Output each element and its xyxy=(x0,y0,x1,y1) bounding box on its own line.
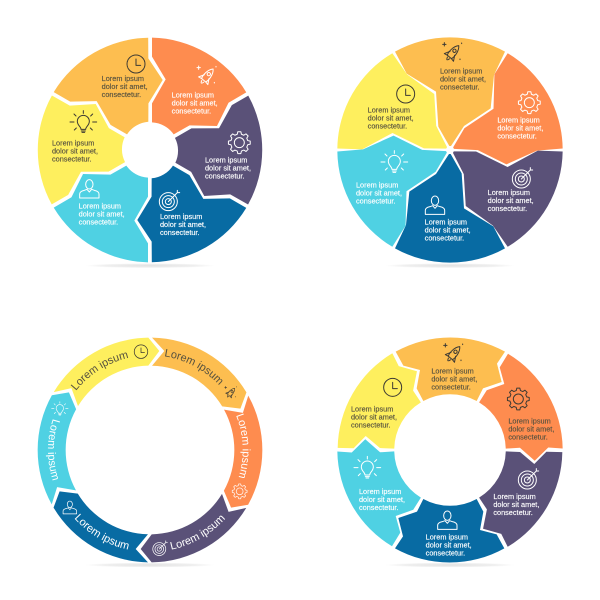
segment: yellow: dolor sit amet, xyxy=(52,147,98,156)
segment: purple: dolor sit amet, xyxy=(493,500,539,509)
segment: yellow: consectetur. xyxy=(52,155,92,164)
segment: blue xyxy=(115,160,246,290)
chart 1: pie with small centre hole xyxy=(5,10,295,290)
segment: orange arrow: Lorem ipsum xyxy=(236,414,251,478)
segment: yellow: Lorem ipsum xyxy=(368,105,410,114)
segment: orange arrow xyxy=(224,396,262,508)
segment: yellow: consectetur. xyxy=(351,421,391,430)
segment: blue: Lorem ipsum xyxy=(160,212,202,221)
segment: cyan: Lorem ipsum xyxy=(356,180,398,189)
segment: blue: consectetur. xyxy=(426,548,465,557)
segment: orange: Lorem ipsum xyxy=(508,417,551,426)
segment: yellow xyxy=(325,346,435,473)
chart 3: thin arrow ring xyxy=(38,338,262,567)
segment: orange: Lorem ipsum xyxy=(497,115,540,124)
segment: cyan: consectetur. xyxy=(79,217,118,226)
segment: gold arrow xyxy=(152,338,246,409)
segment: orange: consectetur. xyxy=(172,106,211,115)
segment: yellow xyxy=(5,74,135,204)
segment: orange: Lorem ipsum xyxy=(172,90,214,99)
segment: cyan: Lorem ipsum xyxy=(79,201,121,210)
segment: yellow: Lorem ipsum xyxy=(52,139,94,148)
segment: orange xyxy=(152,38,246,134)
segment: purple: Lorem ipsum xyxy=(488,188,530,197)
segment: purple: consectetur. xyxy=(488,204,527,213)
segment: purple xyxy=(465,427,575,554)
segment: gold: dolor sit amet, xyxy=(102,82,148,91)
segment: blue arrow: Lorem ipsum xyxy=(74,514,129,550)
segment: purple: dolor sit amet, xyxy=(205,163,251,172)
segment: purple arrow xyxy=(140,494,246,562)
shadow xyxy=(385,563,515,567)
segment: blue: dolor sit amet, xyxy=(160,220,206,229)
segment: cyan: dolor sit amet, xyxy=(356,188,402,197)
segment: cyan arrow xyxy=(38,392,76,504)
segment: gold xyxy=(396,337,505,401)
segment: gold: Lorem ipsum xyxy=(440,66,482,75)
segment: blue: consectetur. xyxy=(160,228,200,237)
segment: blue: Lorem ipsum xyxy=(425,218,467,227)
shadow xyxy=(85,263,215,268)
segment: gold: dolor sit amet, xyxy=(440,74,486,83)
segment: cyan xyxy=(325,104,474,254)
shadow xyxy=(85,563,215,567)
segment: blue: dolor sit amet, xyxy=(425,226,471,235)
segment: yellow: Lorem ipsum xyxy=(351,405,393,414)
segment: purple: consectetur. xyxy=(205,171,245,180)
segment: yellow: dolor sit amet, xyxy=(368,113,414,122)
segment: blue xyxy=(395,154,505,263)
segment: yellow arrow xyxy=(54,338,160,406)
segment: orange: consectetur. xyxy=(497,131,537,140)
segment: yellow: consectetur. xyxy=(368,121,407,130)
segment: cyan: dolor sit amet, xyxy=(79,209,125,218)
segment: orange: dolor sit amet, xyxy=(497,123,543,132)
segment: purple: dolor sit amet, xyxy=(488,196,534,205)
segment: blue arrow xyxy=(54,491,148,562)
segment: gold: dolor sit amet, xyxy=(431,375,477,384)
segment: cyan: consectetur. xyxy=(356,196,396,205)
chart 4: wide ring with arrow notches xyxy=(325,337,575,567)
segment: gold: Lorem ipsum xyxy=(431,367,474,376)
segment: orange: dolor sit amet, xyxy=(508,425,554,434)
segment: cyan: Lorem ipsum xyxy=(359,487,401,496)
segment: gold arrow: Lorem ipsum xyxy=(165,349,222,385)
segment: purple xyxy=(426,104,575,254)
segment: gold xyxy=(395,37,505,146)
segment: purple: Lorem ipsum xyxy=(205,155,247,164)
segment: gold xyxy=(54,10,185,140)
segment: purple arrow: Lorem ipsum xyxy=(170,516,225,550)
segment: cyan: dolor sit amet, xyxy=(359,495,405,504)
segment: orange xyxy=(465,347,575,473)
segment: yellow arrow: Lorem ipsum xyxy=(70,352,128,390)
chart 2: full pie rotated thirty degrees xyxy=(325,37,575,268)
segment: gold: Lorem ipsum xyxy=(102,74,144,83)
segment: purple xyxy=(165,96,295,226)
segment: blue xyxy=(395,499,504,563)
segment: yellow xyxy=(325,46,474,196)
segment: purple: consectetur. xyxy=(493,508,533,517)
segment: blue: Lorem ipsum xyxy=(426,532,468,541)
segment: gold: consectetur. xyxy=(431,383,471,392)
segment: purple: Lorem ipsum xyxy=(493,492,536,501)
segment: cyan xyxy=(54,166,148,262)
segment: blue: dolor sit amet, xyxy=(426,540,472,549)
segment: cyan xyxy=(325,427,435,553)
segment: orange: dolor sit amet, xyxy=(172,98,218,107)
segment: cyan: consectetur. xyxy=(359,503,399,512)
segment: blue: consectetur. xyxy=(425,234,464,243)
shadow xyxy=(385,263,515,268)
segment: gold: consectetur. xyxy=(440,82,480,91)
segment: cyan arrow: Lorem ipsum xyxy=(46,419,60,480)
segment: gold: consectetur. xyxy=(102,90,141,99)
segment: orange xyxy=(426,46,575,196)
segment: yellow: dolor sit amet, xyxy=(351,413,397,422)
segment: orange: consectetur. xyxy=(508,433,548,442)
